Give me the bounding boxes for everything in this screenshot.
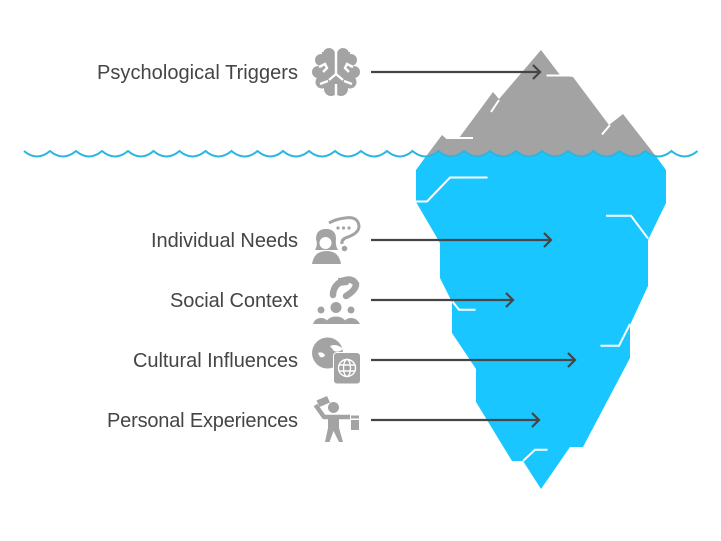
arrow: Cultural Influences bbox=[371, 353, 575, 367]
arrow: Psychological Triggers bbox=[371, 65, 540, 79]
label: Psychological Triggers: Psychological Triggers bbox=[97, 62, 298, 84]
icon: brain bbox=[312, 46, 360, 98]
icon: person with flag and canister bbox=[316, 396, 359, 442]
arrow: Personal Experiences bbox=[371, 413, 539, 427]
label: Cultural Influences: Cultural Influences bbox=[133, 350, 298, 372]
icon: globe and passport bbox=[312, 338, 361, 384]
label: Individual Needs: Individual Needs bbox=[151, 230, 298, 252]
label: Personal Experiences: Personal Experiences bbox=[107, 410, 298, 432]
icon: question mark over group bbox=[313, 277, 360, 324]
arrow: Social Context bbox=[371, 293, 513, 307]
iceberg tip above water bbox=[425, 50, 657, 158]
iceberg bbox=[416, 50, 666, 489]
arrow: Individual Needs bbox=[371, 233, 551, 247]
icon: person with speech bubble bbox=[312, 218, 359, 264]
water line bbox=[24, 151, 698, 156]
label: Social Context: Social Context bbox=[170, 290, 298, 312]
iceberg body below water bbox=[416, 151, 666, 489]
